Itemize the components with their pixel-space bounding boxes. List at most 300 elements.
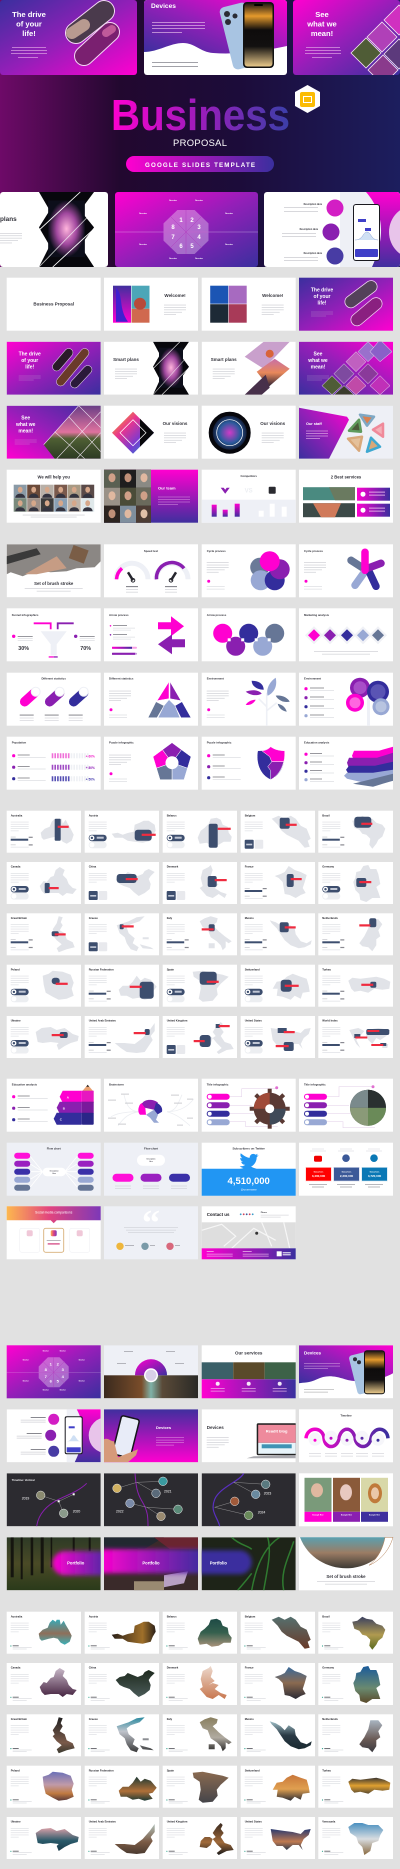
slide: Our team: Our team — [158, 486, 176, 491]
map slide: Denmark: Denmark — [167, 865, 179, 869]
slide: Arrow process circles: Arrow process — [207, 613, 227, 617]
slide: Flow chart three pills: Description — [147, 1158, 155, 1161]
photo map slide: Australia — [7, 1612, 81, 1654]
map slide: United Kingdom: United Kingdom — [167, 1019, 188, 1023]
arrow: right purple — [58, 623, 74, 629]
slide: Funnel infographics — [7, 608, 101, 661]
pill: Google Slides Template — [126, 156, 274, 172]
photo map slide: Australia: Australia — [11, 1614, 23, 1618]
icon: Facebook — [342, 1154, 350, 1162]
photo map slide: Mexico — [241, 1714, 315, 1756]
map slide: Belgium — [241, 811, 315, 853]
slide: Three portraits: Example Here — [312, 1514, 324, 1516]
photo map slide: Venezuela: Venezuela — [322, 1820, 336, 1824]
slide: The drive of your life blue: of your — [314, 294, 331, 300]
bottom slide: phone with icons — [264, 192, 400, 267]
map slide: Ukraine: Ukraine — [11, 1019, 21, 1023]
chart: overlapping circles — [250, 551, 290, 590]
slide: Education analysis books — [299, 737, 393, 790]
map slide: Austria: Austria — [89, 813, 98, 817]
slide: Timeline vertical 2021-2022 — [104, 1473, 198, 1526]
map slide: Turkey — [318, 965, 393, 1007]
map slide: Switzerland — [241, 965, 315, 1007]
slide: Brainstorm: Brainstorm — [109, 1083, 124, 1087]
map slide: Turkey: Turkey — [322, 967, 331, 971]
map slide: World Index — [318, 1016, 393, 1058]
icon: YouTube — [314, 1156, 322, 1162]
photo map slide: Mexico: Mexico — [245, 1717, 254, 1721]
slide: Cycle process circles: Cycle process — [207, 549, 226, 553]
slide: Timeline vertical 2023-2024: 2024 — [258, 1510, 265, 1514]
bottom slide: octagon services: Service — [139, 244, 148, 246]
slide: Octagon services: 5 — [57, 1378, 60, 1383]
map slide: Great Britain — [7, 913, 81, 955]
slide: Portfolio car: Portfolio — [142, 1560, 160, 1565]
slide: Devices wave phones: Devices — [304, 1350, 322, 1355]
map slide: China — [85, 862, 159, 904]
map slide: Mexico: Mexico — [245, 916, 254, 920]
icon: laptop — [257, 1423, 297, 1455]
slide: Octagon services: 3 — [62, 1367, 65, 1372]
photo map slide: Ukraine: Ukraine — [11, 1820, 21, 1824]
map slide: Belarus: Belarus — [167, 813, 177, 817]
top slide: See what we mean: mean! — [311, 29, 333, 38]
slide: Flow chart three pills: Here — [149, 1161, 153, 1163]
slide: See what we mean blue: what we — [307, 358, 328, 364]
map slide: Spain: Spain — [167, 967, 174, 971]
bottom slide: octagon services: 1 — [179, 218, 183, 224]
top slide: See what we mean — [293, 0, 400, 75]
arrow: left purple — [158, 634, 185, 654]
slide: Phone with icons — [6, 1409, 101, 1462]
map slide: United Arab Emirates — [85, 1016, 159, 1058]
slide: Population: Population — [12, 741, 26, 745]
slide: Subscribers on Twitter: Subscribers on Twitter — [233, 1147, 266, 1151]
chart: people rows — [52, 753, 88, 781]
slide: Flow chart five pills: Here — [52, 1173, 56, 1175]
slide: Marketing analysis: Marketing analysis — [304, 613, 329, 617]
map slide: Austria — [85, 811, 159, 853]
top slide: The drive of your life — [0, 0, 137, 75]
map slide: United Kingdom — [163, 1016, 237, 1058]
map slide: Poland: Poland — [11, 967, 20, 971]
bottom slide: Smart plans — [0, 192, 108, 267]
slide: Brainstorm — [104, 1079, 198, 1132]
slide: Social media stats — [299, 1143, 393, 1196]
pill: Google Slides Template: GOOGLE SLIDES TEMPLATE — [145, 162, 255, 169]
icon: company logo — [221, 488, 230, 494]
bottom slide: octagon services: Service — [225, 213, 234, 215]
bottom slide: phone with icons: Description Here — [304, 252, 323, 255]
photo map slide: United Kingdom — [163, 1817, 237, 1859]
slide: Three portraits: Example Here — [369, 1514, 380, 1516]
slide: Devices hand phone: Devices — [156, 1425, 172, 1430]
slide: Octagon services: 2 — [57, 1361, 60, 1366]
map image — [202, 1222, 296, 1248]
slide: See what we mean diagonal: mean! — [18, 429, 33, 435]
slide: Portfolio plants — [202, 1537, 296, 1590]
slide: Devices laptop — [202, 1409, 297, 1462]
map slide: Belgium: Belgium — [245, 813, 256, 817]
slide: Flow chart three pills: Flow chart — [144, 1147, 158, 1151]
slide: Puzzle pentagon — [104, 737, 198, 790]
photo grid — [14, 485, 94, 512]
slide: Octagon services: Service — [60, 1350, 66, 1352]
slide: Smart plans zigzag: Smart plans — [113, 357, 139, 362]
map slide: Greece: Greece — [89, 916, 98, 920]
map slide: Ukraine — [7, 1016, 81, 1058]
YouTube box: 3,400,000 — [312, 1174, 325, 1178]
map slide: Brazil — [318, 811, 393, 853]
icon: front phone — [243, 2, 274, 68]
slide: Competitors — [202, 470, 296, 523]
map slide: Netherlands — [318, 913, 393, 955]
slide: See what we mean blue: mean! — [311, 365, 326, 371]
slide: Subscribers on Twitter: 4,510,000 — [228, 1176, 270, 1187]
icon: phone — [353, 204, 380, 261]
photo map slide: Austria — [85, 1612, 159, 1654]
bottom slide: octagon services: 3 — [197, 225, 201, 231]
slide: Population — [7, 737, 101, 790]
slide: Education analysis pencil — [7, 1079, 101, 1132]
slide: Cycle process links: Cycle process — [304, 549, 323, 553]
slide: The drive of your life magenta: The drive — [19, 352, 41, 358]
slide: Puzzle pentagon: Puzzle infographic — [109, 741, 134, 745]
slide: Flow chart five pills: Flow chart — [47, 1147, 61, 1151]
slide: Smart plans sunset: Smart plans — [211, 357, 237, 362]
slide: Octagon services: Service — [43, 1389, 49, 1391]
photo map slide: Belgium — [241, 1612, 315, 1654]
slide: Timeline wave — [299, 1409, 393, 1462]
slide: Our services — [202, 1345, 296, 1398]
slide: Population: + 50% — [86, 778, 95, 782]
slide: Different statistics triangle — [104, 673, 198, 726]
photo map slide: Great Britain: Great Britain — [11, 1717, 27, 1721]
slide: Octagon services: Service — [23, 1380, 29, 1382]
icon: leaf circle — [322, 224, 340, 240]
slide: Our visions diamond — [104, 406, 198, 459]
photo map slide: Germany: Germany — [322, 1666, 334, 1670]
map slide: Canada: Canada — [11, 865, 21, 869]
photo map slide: Belarus: Belarus — [167, 1614, 177, 1618]
slide: Testimonials quote — [104, 1202, 198, 1259]
slide: Environment leaves: Environment — [207, 677, 224, 681]
map slide: Denmark — [163, 862, 237, 904]
staff petals — [348, 415, 383, 452]
icon: brain — [138, 1100, 162, 1123]
chart: link petals — [351, 552, 381, 586]
slide: Set of brush stroke: Set of brush stroke — [34, 581, 74, 586]
slide: Portfolio plants: Portfolio — [210, 1560, 227, 1565]
slide: Education analysis pencil: Education analysis — [12, 1083, 37, 1087]
slide: Social media comparisons: Social media comparisons — [35, 1210, 73, 1214]
photo map slide: Netherlands — [318, 1714, 393, 1756]
map slide: Greece — [85, 913, 159, 955]
bottom slide: phone with icons: Description Here — [304, 203, 323, 206]
map slide: United States: United States — [245, 1019, 262, 1023]
photo map slide: Turkey: Turkey — [322, 1768, 331, 1772]
slide: Octagon services — [7, 1345, 101, 1398]
slide: Devices wave phones — [299, 1345, 393, 1398]
photo map slide: Poland — [7, 1766, 81, 1808]
slide: Octagon services: 1 — [50, 1361, 53, 1366]
slide: Title infographic circle — [299, 1079, 393, 1132]
slide: Our services: Our services — [235, 1350, 263, 1355]
slide: Subscribers on Twitter: @username — [241, 1188, 257, 1192]
slide: Timeline vertical 2019-2020: 2020 — [73, 1509, 80, 1513]
map slide: France: France — [245, 865, 254, 869]
slide: Octagon services: 4 — [62, 1374, 65, 1379]
photo map slide: Poland: Poland — [11, 1768, 20, 1772]
slide: Timeline vertical 2019-2020 — [7, 1473, 101, 1526]
slide: Welcome photos: Welcome! — [164, 293, 186, 298]
slide: Marketing analysis — [299, 608, 393, 661]
chart: gear photo — [250, 1089, 290, 1129]
slide: Environment leaves — [202, 673, 296, 726]
icon: star circle — [326, 200, 344, 216]
slide: See what we mean diagonal — [7, 406, 101, 459]
map slide: Belarus — [163, 811, 237, 853]
slide: Timeline vertical 2021-2022: 2022 — [116, 1509, 124, 1513]
icon: Google Slides badge — [295, 85, 320, 113]
slide: The drive of your life blue: The drive — [311, 288, 333, 294]
slide: Different statistics capsules: Different statistics — [41, 677, 66, 681]
top slide: See what we mean: See — [315, 10, 329, 19]
photo map slide: Russian Federation — [85, 1766, 159, 1808]
slide: Environment circles — [299, 673, 393, 726]
photo map slide: Turkey — [318, 1766, 393, 1808]
photo map slide: Greece — [85, 1714, 159, 1756]
photo map slide: Netherlands: Netherlands — [322, 1717, 338, 1721]
icon: LinkedIn — [370, 1154, 378, 1162]
photo map slide: Italy: Italy — [167, 1717, 173, 1721]
map slide: Switzerland: Switzerland — [245, 967, 260, 971]
slide: See what we mean blue — [299, 340, 393, 395]
bottom slide: octagon services: Service — [169, 200, 178, 202]
photo map slide: Brazil — [318, 1612, 393, 1654]
top slide: The drive of your life: of your — [16, 20, 42, 28]
slide: See what we mean blue: See — [314, 352, 323, 358]
photo map slide: United Arab Emirates: United Arab Emirates — [89, 1820, 116, 1824]
slide: Environment circles: Environment — [304, 677, 321, 681]
bottom slide: octagon services: 6 — [179, 244, 183, 250]
slide: Population: + 60% — [86, 755, 95, 759]
map slide: Australia: Australia — [11, 813, 23, 817]
slide: Different statistics triangle: Different statistics — [109, 677, 134, 681]
map slide: Brazil: Brazil — [322, 813, 330, 817]
chart: gauge right — [156, 563, 188, 582]
map slide: Mexico — [241, 913, 315, 955]
map slide: World Index: World Index — [322, 1019, 338, 1023]
slide: Subscribers on Twitter — [202, 1143, 296, 1196]
slide: Different statistics capsules — [7, 673, 101, 726]
slide: Business Proposal: Business Proposal — [33, 302, 74, 307]
top slide: The drive of your life: life! — [22, 29, 36, 38]
photo map slide: Italy — [163, 1714, 237, 1756]
slide: Contact us: Contact us — [207, 1212, 230, 1217]
photo map slide: Belarus — [163, 1612, 237, 1654]
photo map slide: United Arab Emirates — [85, 1817, 159, 1859]
map slide: United Arab Emirates: United Arab Emirates — [89, 1019, 116, 1023]
slide: Smart plans zigzag — [104, 342, 198, 395]
slide: See what we mean diagonal: See — [21, 416, 30, 422]
map slide: Italy — [163, 913, 237, 955]
photo map slide: Belgium: Belgium — [245, 1614, 256, 1618]
chart: circle photo — [350, 1090, 386, 1126]
photo map slide: Denmark — [163, 1663, 237, 1705]
slide: Cycle process links — [299, 544, 393, 597]
map slide: Netherlands: Netherlands — [322, 916, 338, 920]
LinkedIn box — [362, 1167, 387, 1181]
map slide: Great Britain: Great Britain — [11, 916, 27, 920]
photo map slide: Brazil: Brazil — [322, 1614, 330, 1618]
slide: Octagon services: Service — [23, 1359, 29, 1361]
icon: twitter bird — [240, 1153, 259, 1168]
bottom slide: octagon services: 7 — [171, 235, 175, 241]
chart: shield — [257, 747, 285, 780]
slide: Contact us: Phone — [261, 1212, 268, 1214]
bottom slide: octagon services: Service — [195, 258, 204, 260]
map slide: Spain — [163, 965, 237, 1007]
Facebook box: Subscribers — [342, 1172, 351, 1174]
slide: Timeline vertical 2019-2020: Timeline: Vertical — [12, 1478, 35, 1482]
photo map slide: France: France — [245, 1666, 254, 1670]
YouTube box: Subscribers — [314, 1172, 323, 1174]
slide: Welcome four photos: Welcome! — [262, 293, 284, 298]
title: Business: Business — [111, 91, 290, 140]
slide: Funnel infographics: 30% — [18, 646, 29, 652]
icon: phone — [65, 1416, 83, 1454]
chart: wave timeline — [306, 1429, 388, 1447]
slide: Semicircle menu with towers — [104, 1345, 198, 1398]
slide: Puzzle shield — [202, 737, 296, 790]
bottom slide: octagon services: Service — [139, 213, 148, 215]
photo map slide: Spain — [163, 1766, 237, 1808]
map slide: Poland — [7, 965, 81, 1007]
photo map slide: China — [85, 1663, 159, 1705]
slide: Octagon services: Service — [79, 1359, 85, 1361]
slide: Timeline vertical 2021-2022: 2021 — [164, 1489, 172, 1493]
slide: Puzzle shield: Puzzle infographic — [207, 741, 232, 745]
photo map slide: United Kingdom: United Kingdom — [167, 1820, 188, 1824]
Facebook box — [334, 1167, 359, 1181]
Facebook box: 2,300,000 — [340, 1174, 353, 1178]
icon: globe circle — [326, 248, 344, 264]
slide: Education analysis pencil: B — [63, 1107, 66, 1111]
slide: The drive of your life magenta — [7, 342, 101, 395]
slide: Education analysis pencil: C — [60, 1118, 63, 1122]
arrow: right magenta — [158, 616, 184, 636]
top slide: See what we mean: what we — [306, 20, 337, 28]
top slide: The drive of your life: The drive — [12, 10, 46, 19]
slide: 2 Best services: 2 Best services — [331, 475, 362, 480]
bottom slide: octagon services — [115, 192, 258, 267]
slide: Set of brush stroke arc — [299, 1537, 393, 1590]
photo map slide: Switzerland — [241, 1766, 315, 1808]
slide: Cycle process circles — [202, 544, 296, 597]
slide: Our visions circle: Our visions — [260, 421, 286, 426]
slide: Octagon services: Service — [43, 1350, 49, 1352]
icon: front phone — [364, 1350, 385, 1394]
slide: Octagon services: 7 — [45, 1374, 48, 1379]
slide: Our visions circle — [202, 406, 296, 459]
bottom slide: octagon services: Service — [169, 258, 178, 260]
photo map slide: Austria: Austria — [89, 1614, 98, 1618]
map slide: Australia — [7, 811, 81, 853]
chart: puzzle pentagon — [153, 743, 191, 780]
slide: Arrow process: Arrow process — [109, 613, 129, 617]
slide: The drive of your life magenta: life! — [25, 365, 34, 371]
icon: tree — [259, 693, 277, 726]
bottom slide: octagon services: 4 — [197, 235, 201, 241]
slide: Octagon services: Service — [60, 1389, 66, 1391]
slide: Timeline wave: Timeline — [340, 1413, 352, 1417]
slide: Speed test: Speed test — [144, 549, 158, 553]
photo map slide: Switzerland: Switzerland — [245, 1768, 260, 1772]
slide: Title infographic circle: Title infographic — [304, 1083, 326, 1087]
slide: Set of brush stroke arc: Set of brush stroke — [326, 1574, 366, 1579]
photo map slide: Great Britain — [7, 1714, 81, 1756]
photo map slide: China: China — [89, 1666, 97, 1670]
slide: Octagon services: 8 — [45, 1367, 48, 1372]
hero banner — [0, 0, 400, 267]
slide: Portfolio car — [104, 1537, 198, 1590]
arrow: left magenta — [34, 623, 51, 629]
photo map slide: Canada: Canada — [11, 1666, 21, 1670]
bottom slide: octagon services: 8 — [171, 225, 175, 231]
slide: The drive of your life magenta: of your — [21, 358, 38, 364]
slide: Education analysis pencil: A — [67, 1096, 70, 1100]
slide: Our visions diamond: Our visions — [163, 421, 188, 426]
bottom slide: Smart plans: plans — [0, 216, 17, 223]
slide: The drive of your life blue — [299, 278, 393, 331]
map slide: Italy: Italy — [167, 916, 173, 920]
slide: Testimonials quote: “ — [142, 1202, 160, 1242]
photo map slide: Venezuela — [318, 1817, 393, 1859]
slide: Speed test — [104, 544, 198, 597]
photo map slide: Denmark: Denmark — [167, 1666, 179, 1670]
slide: We will help you — [7, 470, 101, 523]
slide: Our staff — [299, 406, 393, 459]
slide: Funnel infographics: Funnel infographics — [12, 613, 39, 617]
slide: Contact us — [202, 1206, 296, 1259]
slide: The drive of your life blue: life! — [318, 301, 327, 307]
photo map slide: France — [241, 1663, 315, 1705]
slide: Competitors: VS — [245, 489, 253, 495]
photo map slide: Canada — [7, 1663, 81, 1705]
slide: Devices laptop: Devices — [207, 1425, 224, 1430]
slide: Competitors: Competitors — [240, 474, 257, 478]
top slide: Devices: Devices — [151, 3, 176, 10]
slide: We will help you: We will help you — [37, 475, 70, 480]
slide: Timeline vertical 2019-2020: 2019 — [22, 1496, 29, 1500]
slide: Octagon services: 6 — [50, 1378, 53, 1383]
slide: Our team — [104, 470, 198, 523]
slide: Business Proposal — [7, 278, 101, 331]
slide: Title infographic gear: Title infographic — [207, 1083, 229, 1087]
slide: Arrow process circles — [202, 608, 296, 661]
chart: book stack — [344, 747, 393, 787]
YouTube box — [306, 1167, 331, 1181]
photo map slide: United States: United States — [245, 1820, 262, 1824]
photo map slide: Spain: Spain — [167, 1768, 174, 1772]
map slide: China: China — [89, 865, 97, 869]
subtitle: Proposal: PROPOSAL — [173, 137, 227, 148]
slide: Devices laptop: Readit blog — [266, 1428, 288, 1433]
slide: Three portraits — [299, 1473, 393, 1526]
slide: Portfolio forest: Portfolio — [67, 1560, 85, 1565]
map slide: United States — [241, 1016, 315, 1058]
